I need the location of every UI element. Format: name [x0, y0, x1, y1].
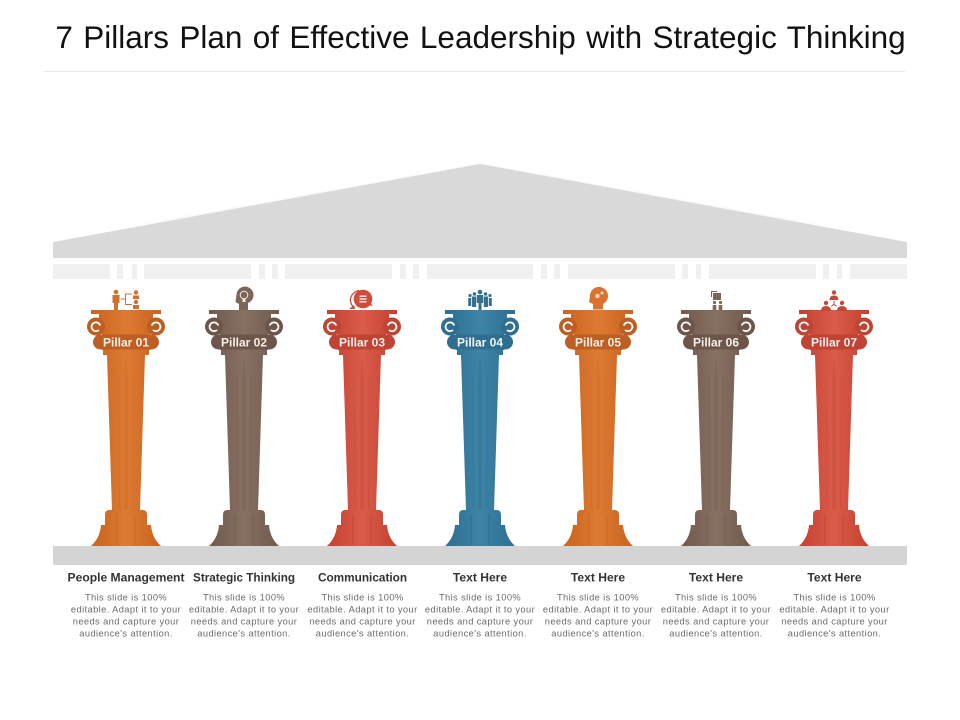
caption 1: editable. Adapt it to your	[71, 604, 181, 614]
caption 3: audience's attention.	[316, 628, 409, 638]
caption 4: editable. Adapt it to your	[425, 604, 535, 614]
caption 5: This slide is 100%	[557, 592, 639, 602]
caption 4: This slide is 100%	[439, 592, 521, 602]
caption 3: Communication	[318, 570, 407, 584]
caption 5: Text Here	[571, 570, 625, 584]
caption 2	[189, 572, 299, 638]
caption 1: People Management	[68, 570, 184, 584]
caption 7: needs and capture your	[781, 616, 888, 626]
pillar 07: Pillar 07	[811, 336, 857, 350]
caption 1: audience's attention.	[79, 628, 173, 638]
pillar 03	[323, 290, 401, 546]
caption 1: needs and capture your	[73, 616, 179, 626]
caption 6: editable. Adapt it to your	[661, 604, 771, 614]
icon: speech bubbles	[349, 290, 373, 309]
temple roof	[53, 163, 907, 258]
caption 5: editable. Adapt it to your	[543, 604, 653, 614]
caption 6	[661, 570, 771, 638]
caption 2: needs and capture your	[191, 616, 297, 626]
caption 5: audience's attention.	[551, 628, 645, 638]
caption 6: This slide is 100%	[675, 592, 757, 602]
frieze band	[53, 264, 907, 279]
caption 6: Text Here	[689, 570, 743, 584]
pillar 02: Pillar 02	[221, 336, 267, 350]
caption 2: editable. Adapt it to your	[189, 604, 299, 614]
icon: head with gears	[589, 287, 608, 310]
caption 4: Text Here	[453, 570, 507, 584]
floor band	[53, 546, 907, 565]
icon: two people with chat box	[711, 291, 722, 310]
caption 5	[543, 570, 653, 638]
icon: head with light bulb	[236, 287, 253, 310]
icon: three person network	[821, 290, 847, 311]
caption 4	[425, 570, 535, 638]
icon: org chart people	[112, 290, 139, 310]
caption 6: needs and capture your	[663, 616, 769, 626]
pillar 02	[205, 287, 283, 546]
caption 4: needs and capture your	[427, 616, 533, 626]
caption 3: needs and capture your	[309, 616, 416, 626]
title: 7 Pillars Plan of Effective Leadership with Strategic Thinking	[55, 19, 906, 55]
pillar 05: Pillar 05	[575, 336, 621, 350]
caption 2: This slide is 100%	[203, 592, 285, 602]
pillar 03: Pillar 03	[339, 336, 385, 350]
caption 5: needs and capture your	[545, 616, 651, 626]
pillar 04: Pillar 04	[457, 336, 503, 350]
pillar 04	[441, 290, 519, 546]
caption 4: audience's attention.	[433, 628, 527, 638]
pillar 07	[795, 290, 873, 546]
caption 1: This slide is 100%	[85, 592, 167, 602]
caption 2: audience's attention.	[197, 628, 291, 638]
caption 7	[779, 570, 890, 638]
caption 7: This slide is 100%	[793, 592, 876, 602]
caption 7: audience's attention.	[788, 628, 881, 638]
caption 3: This slide is 100%	[321, 592, 404, 602]
caption 7: editable. Adapt it to your	[779, 604, 890, 614]
pillar 06	[677, 291, 755, 546]
caption 6: audience's attention.	[669, 628, 763, 638]
caption 3	[307, 570, 418, 638]
icon: team group	[468, 290, 492, 310]
pillar 01: Pillar 01	[103, 336, 149, 350]
pillar 01	[87, 290, 165, 546]
caption 3: editable. Adapt it to your	[307, 604, 418, 614]
pillar 05	[559, 287, 637, 546]
pillar 06: Pillar 06	[693, 336, 739, 350]
caption 7: Text Here	[807, 570, 862, 584]
caption 2: Strategic Thinking	[193, 572, 295, 584]
caption 1	[68, 570, 184, 638]
